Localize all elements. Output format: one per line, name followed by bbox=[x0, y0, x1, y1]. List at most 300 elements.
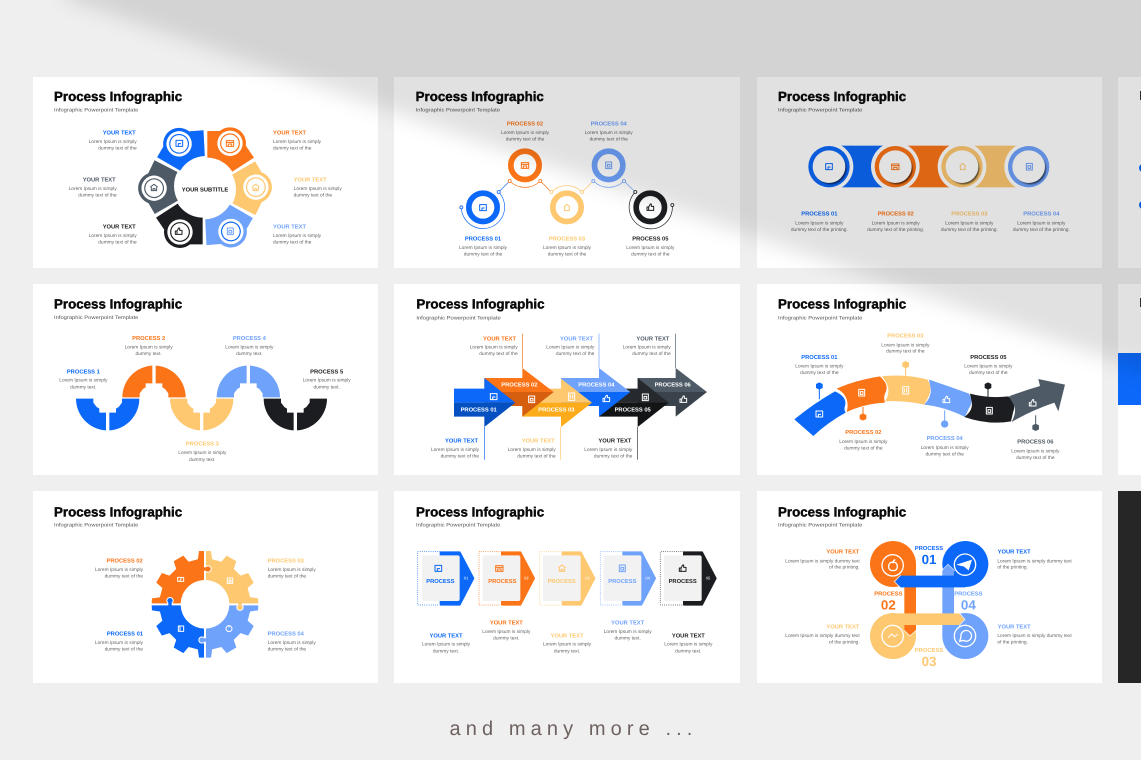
text block: top right bbox=[997, 548, 1072, 570]
text block: process 04: dummy text of the bbox=[589, 137, 628, 142]
text block: process 02: PROCESS 02 bbox=[878, 210, 914, 217]
icon: gear orange bbox=[178, 577, 184, 581]
text block: card 01: Lorem Ipsum is simply bbox=[422, 642, 470, 647]
text block: process 1: dummy text. bbox=[70, 384, 96, 390]
text block: top orange: dummy text of the bbox=[479, 351, 518, 356]
arrow labels: PROCESS 06 bbox=[655, 381, 691, 388]
label: process 03: 03 bbox=[922, 654, 936, 669]
text block: process 03 bbox=[881, 332, 930, 354]
label: process 03 bbox=[915, 647, 943, 669]
chevron card 03: 03 bbox=[585, 576, 590, 581]
text block: card 02: YOUR TEXT bbox=[490, 619, 523, 626]
text block: card 04: dummy text. bbox=[615, 635, 641, 641]
heading: Process Infographic bbox=[54, 297, 182, 311]
text block: process 06: PROCESS 06 bbox=[1017, 438, 1053, 445]
band: orange bbox=[895, 146, 962, 187]
text block: process 06: Lorem Ipsum is simply bbox=[1011, 449, 1060, 454]
text block: bottom black bbox=[584, 437, 633, 459]
text block: process 01: Lorem Ipsum is simply bbox=[95, 640, 143, 645]
puzzle tab: blue bbox=[166, 597, 174, 606]
text block: process 02: dummy text of the bbox=[844, 446, 883, 451]
text block: process 02: PROCESS 02 bbox=[845, 429, 881, 435]
chevron card 04: PROCESS bbox=[608, 578, 636, 584]
panel: linked circles band bbox=[757, 77, 1102, 268]
text block: process 4: PROCESS 4 bbox=[233, 335, 266, 341]
text block: process 05 bbox=[626, 235, 675, 257]
pin stems bbox=[819, 365, 1036, 427]
text block: bottom left: YOUR TEXT bbox=[826, 623, 859, 630]
arc: process 4 bbox=[217, 366, 280, 397]
text block: grey: dummy text of the bbox=[78, 193, 117, 198]
text block: orange: YOUR TEXT bbox=[273, 129, 306, 136]
icon: process 03 bbox=[960, 163, 966, 170]
text block: process 03 bbox=[941, 210, 998, 232]
chevron card 02: 02 bbox=[524, 576, 529, 581]
text block: card 05 bbox=[664, 632, 713, 654]
text block: process 04: Lorem Ipsum is simply bbox=[268, 640, 316, 645]
text block: card 04 bbox=[604, 619, 652, 641]
text block: process 01 bbox=[459, 235, 507, 257]
text block: bottom left: of the printing. bbox=[829, 640, 860, 645]
label: process 02 bbox=[874, 590, 902, 612]
icon: process 02 bbox=[521, 163, 529, 168]
chevron card 05 bbox=[660, 552, 716, 605]
text block: process 05: PROCESS 05 bbox=[970, 354, 1007, 360]
icon: arrow 05 bbox=[642, 394, 648, 401]
band: yellow bbox=[962, 146, 1029, 187]
text block: bottom blue: Lorem Ipsum is simply bbox=[431, 447, 479, 452]
text block: card 01 bbox=[422, 632, 470, 654]
label: process 04 bbox=[954, 590, 982, 612]
arrow labels bbox=[461, 381, 691, 413]
subheading: Infographic Powerpoint Template bbox=[54, 315, 138, 320]
text block: process 04 bbox=[1013, 210, 1070, 232]
text block: process 03: PROCESS 03 bbox=[268, 557, 304, 564]
icon: process 02 bbox=[892, 164, 899, 170]
panel: cropped slide middle right bbox=[1118, 284, 1141, 475]
text block: process 02: Lorem Ipsum is simply bbox=[501, 130, 549, 135]
loop circle: blue bbox=[942, 541, 988, 587]
text block: process 04: Lorem Ipsum is simply bbox=[1017, 220, 1066, 226]
text block: process 03: Lorem Ipsum is simply bbox=[881, 342, 930, 348]
label: process 03: PROCESS bbox=[915, 647, 943, 653]
gear quarter: light blue bbox=[206, 605, 258, 658]
text block: process 01 bbox=[95, 630, 143, 652]
text block: top left: of the printing. bbox=[829, 565, 860, 570]
icon: gear yellow bbox=[227, 578, 233, 583]
text block: process 03: dummy text of the bbox=[886, 349, 925, 354]
icon: blue segment bbox=[176, 140, 183, 146]
panel: chevron cards bbox=[394, 491, 740, 683]
cropped title edge bbox=[1140, 298, 1141, 307]
label: process 02: 02 bbox=[881, 598, 896, 612]
text block: process 03: PROCESS 03 bbox=[887, 332, 923, 339]
icon: yellow segment bbox=[252, 184, 259, 191]
text block: black: Lorem Ipsum is simply bbox=[89, 233, 137, 238]
text block: process 01: PROCESS 01 bbox=[465, 235, 501, 242]
connector nodes bbox=[460, 179, 674, 209]
text block: process 03: Lorem Ipsum is simply bbox=[543, 245, 591, 250]
text block: black: YOUR TEXT bbox=[103, 223, 136, 230]
arrow: process 05 bbox=[599, 378, 669, 427]
text block: process 02: PROCESS 02 bbox=[106, 557, 143, 564]
subheading: Infographic Powerpoint Template bbox=[54, 107, 138, 113]
text block: process 01: PROCESS 01 bbox=[801, 210, 838, 217]
panel: radial process wheel bbox=[33, 77, 378, 268]
text block: card 02: dummy text. bbox=[493, 635, 519, 641]
text block: light blue: YOUR TEXT bbox=[273, 223, 306, 230]
text block: process 01: Lorem Ipsum is simply bbox=[459, 245, 507, 250]
arrow labels: PROCESS 01 bbox=[461, 406, 497, 413]
text block: process 04: PROCESS 04 bbox=[1023, 210, 1060, 217]
text block: card 03: Lorem Ipsum is simply bbox=[543, 642, 591, 647]
text block: top light blue: Lorem Ipsum is simply bbox=[546, 345, 595, 350]
chevron card 01 bbox=[418, 552, 473, 605]
text block: process 2: Lorem Ipsum is simply bbox=[125, 344, 173, 350]
text block: blue: Lorem Ipsum is simply bbox=[89, 139, 137, 144]
text block: blue: YOUR TEXT bbox=[103, 129, 136, 136]
text block: process 2: dummy text. bbox=[136, 351, 162, 356]
text block: light blue bbox=[273, 223, 321, 245]
text block: bottom yellow bbox=[508, 437, 556, 459]
text block: bottom right: YOUR TEXT bbox=[998, 623, 1031, 630]
gear quarter: blue bbox=[152, 605, 204, 658]
text block: orange bbox=[273, 129, 321, 151]
chevron card 03: PROCESS bbox=[548, 578, 576, 584]
icon: piece 02 bbox=[859, 389, 865, 396]
text block: process 04: PROCESS 04 bbox=[591, 120, 627, 127]
text block: process 02: dummy text of the printing. bbox=[867, 227, 924, 232]
icon: piece 01 bbox=[816, 411, 823, 417]
icon: process 05 bbox=[647, 204, 654, 210]
loop band: yellow bbox=[893, 613, 964, 625]
text block: process 04 bbox=[268, 630, 316, 652]
icon: process 01 bbox=[826, 164, 832, 170]
wheel segment: light blue bbox=[194, 198, 256, 260]
text block: process 02: Lorem Ipsum is simply bbox=[839, 439, 888, 444]
text block: light blue: Lorem Ipsum is simply bbox=[273, 233, 321, 238]
heading: Process Infographic bbox=[778, 505, 906, 519]
text block: black bbox=[89, 223, 137, 245]
text block: process 01: dummy text of the bbox=[464, 252, 502, 257]
text block: bottom blue: YOUR TEXT bbox=[445, 437, 478, 444]
text block: process 01: dummy text of the bbox=[105, 647, 143, 652]
puzzle arrow: process 06 bbox=[1009, 379, 1065, 422]
text block: card 04: YOUR TEXT bbox=[611, 619, 644, 626]
text block: process 06 bbox=[1011, 438, 1060, 460]
icon: orange segment bbox=[226, 141, 234, 146]
text block: process 3: PROCESS 3 bbox=[186, 440, 219, 447]
icon: arrow 04 bbox=[603, 395, 610, 402]
text block: yellow: Lorem Ipsum is simply bbox=[294, 186, 342, 191]
text block: bottom yellow: Lorem Ipsum is simply bbox=[508, 447, 556, 452]
panel: cropped slide bottom right bbox=[1118, 491, 1141, 683]
text block: bottom black: YOUR TEXT bbox=[598, 437, 631, 444]
panel: gear puzzle bbox=[33, 491, 378, 683]
ring: process 01 bbox=[469, 193, 497, 221]
icon: light blue segment bbox=[227, 228, 233, 235]
icon: grey segment bbox=[150, 184, 158, 191]
text block: process 04: dummy text of the bbox=[925, 451, 964, 457]
text block: process 02: Lorem Ipsum is simply bbox=[95, 567, 143, 572]
text block: process 02: dummy text of the bbox=[105, 574, 143, 579]
gear quarter: yellow bbox=[206, 551, 258, 603]
gear quarter: orange bbox=[152, 551, 204, 603]
text block: bottom black: dummy text of the bbox=[594, 453, 632, 459]
text block: bottom right: of the printing. bbox=[997, 640, 1028, 645]
circle: process 02 bbox=[871, 142, 920, 191]
text block: process 04: PROCESS 04 bbox=[268, 630, 304, 637]
text block: bottom yellow: dummy text of the bbox=[517, 453, 556, 459]
arrow: process 03 bbox=[522, 379, 592, 427]
text block: process 05: dummy text of the bbox=[631, 252, 670, 257]
chevron card 04: 04 bbox=[645, 576, 650, 581]
puzzle piece: process 05 bbox=[964, 394, 1014, 423]
text block: process 01: Lorem Ipsum is simply bbox=[795, 364, 844, 369]
text block: process 02: PROCESS 02 bbox=[507, 120, 543, 127]
text block: process 01 bbox=[795, 354, 844, 375]
arrow labels: PROCESS 03 bbox=[538, 406, 574, 413]
text block: blue bbox=[89, 129, 137, 151]
puzzle piece: process 03 bbox=[882, 376, 930, 405]
text block: top grey: YOUR TEXT bbox=[636, 335, 669, 342]
text block: black: dummy text of the bbox=[98, 240, 137, 245]
text block: bottom blue bbox=[431, 437, 479, 459]
text block: card 05: dummy text. bbox=[675, 648, 701, 654]
icon: process 04 bbox=[606, 162, 612, 169]
text block: process 03: dummy text of the printing. bbox=[941, 227, 998, 232]
text block: process 05: dummy text of the bbox=[969, 370, 1008, 375]
text block: process 02: Lorem Ipsum is simply bbox=[872, 220, 920, 226]
text block: process 03 bbox=[543, 235, 591, 257]
arc: process 5 bbox=[264, 399, 327, 430]
ring: process 02 bbox=[511, 151, 539, 179]
pin heads bbox=[816, 361, 1039, 431]
puzzle piece: process 04 bbox=[924, 380, 971, 417]
circle: process 01 bbox=[805, 142, 853, 191]
loop band: blue bbox=[895, 576, 965, 587]
text block: process 06: dummy text of the bbox=[1016, 455, 1055, 460]
text block: process 04: Lorem Ipsum is simply bbox=[921, 445, 969, 450]
text block: process 01: dummy text of the bbox=[800, 370, 839, 375]
cropped blue dots bbox=[1139, 164, 1141, 209]
text block: process 05: Lorem Ipsum is simply bbox=[626, 245, 675, 250]
text block: top light blue: dummy text of the bbox=[556, 351, 594, 356]
circle: process 04 bbox=[1004, 142, 1053, 191]
icon: process 01 bbox=[480, 205, 486, 211]
heading: Process Infographic bbox=[54, 505, 182, 519]
connector lines bbox=[461, 181, 672, 229]
icon: piece 04 bbox=[943, 396, 950, 403]
subheading: Infographic Powerpoint Template bbox=[416, 522, 500, 528]
icon ring: blue send bbox=[954, 554, 976, 575]
text block: top right: YOUR TEXT bbox=[998, 548, 1031, 555]
icon: gear blue bbox=[178, 626, 184, 631]
heading: Process Infographic bbox=[778, 89, 906, 104]
puzzle tab: orange bbox=[203, 565, 212, 573]
text block: bottom left bbox=[785, 623, 860, 645]
chevron card 02: PROCESS bbox=[488, 578, 516, 584]
icon ring: orange apple bbox=[882, 555, 903, 576]
text block: top orange: Lorem Ipsum is simply bbox=[470, 345, 518, 350]
chevron card 01: PROCESS bbox=[426, 578, 454, 584]
icon ring: light blue phone bbox=[954, 625, 976, 647]
subheading: Infographic Powerpoint Template bbox=[778, 315, 862, 321]
label: process 01: 01 bbox=[922, 552, 936, 567]
text block: card 02: Lorem Ipsum is simply bbox=[482, 629, 531, 634]
text block: process 04: PROCESS 04 bbox=[927, 435, 963, 441]
text block: top grey: dummy text of the bbox=[632, 351, 671, 356]
text block: grey: Lorem Ipsum is simply bbox=[69, 186, 117, 191]
loop: orange bbox=[870, 541, 916, 635]
icon: arrow 01 bbox=[490, 394, 497, 400]
text block: top orange: YOUR TEXT bbox=[483, 335, 516, 342]
loop circle: yellow bbox=[870, 613, 916, 659]
arc: process 3 bbox=[170, 399, 233, 430]
wheel segment: blue bbox=[154, 115, 216, 178]
text block: orange: dummy text of the bbox=[273, 146, 311, 151]
ring: process 03 bbox=[553, 193, 581, 221]
text block: top left: YOUR TEXT bbox=[826, 548, 859, 555]
text block: card 01: YOUR TEXT bbox=[430, 632, 463, 639]
wheel segment: grey bbox=[128, 153, 190, 216]
text block: process 04 bbox=[585, 120, 633, 142]
text block: process 3: dummy text. bbox=[189, 457, 215, 462]
text block: process 01: dummy text of the printing. bbox=[791, 227, 848, 232]
label: process 02: PROCESS bbox=[874, 590, 902, 597]
text block: top grey bbox=[623, 335, 671, 356]
text block: top left bbox=[785, 548, 860, 570]
text block: yellow: YOUR TEXT bbox=[294, 176, 327, 183]
text block: card 03: YOUR TEXT bbox=[551, 632, 584, 639]
text block: process 04: dummy text of the bbox=[268, 647, 306, 652]
label: process 01 bbox=[915, 545, 943, 567]
puzzle piece: process 01 bbox=[794, 391, 846, 436]
text block: process 04: dummy text of the printing. bbox=[1013, 227, 1070, 232]
text block: process 02 bbox=[95, 557, 143, 579]
panel: wave arcs bbox=[33, 284, 378, 475]
arrow: process 02 bbox=[484, 368, 554, 417]
arrow: process 01 bbox=[454, 378, 515, 427]
text block: process 4 bbox=[225, 335, 274, 356]
text block: top light blue: YOUR TEXT bbox=[560, 335, 593, 342]
icon: arrow 03 bbox=[569, 393, 575, 400]
text block: top right: Lorem Ipsum is simply dummy text bbox=[997, 558, 1072, 564]
footer caption: and many more ... bbox=[450, 718, 697, 740]
heading: Process Infographic bbox=[416, 297, 545, 312]
cropped title edge bbox=[1140, 91, 1141, 100]
circle: process 03 bbox=[938, 142, 986, 191]
text block: top right: of the printing. bbox=[997, 565, 1028, 570]
label: process 04: PROCESS bbox=[954, 590, 982, 597]
leader lines bbox=[484, 334, 676, 460]
text block: bottom left: Lorem Ipsum is simply dummy text bbox=[785, 633, 860, 638]
puzzle piece: process 02 bbox=[837, 376, 887, 412]
arrow labels: PROCESS 05 bbox=[615, 406, 651, 413]
text block: process 02 bbox=[501, 120, 549, 142]
text block: bottom yellow: YOUR TEXT bbox=[522, 437, 555, 444]
text block: card 04: Lorem Ipsum is simply bbox=[604, 629, 652, 634]
text block: process 1 bbox=[59, 368, 108, 390]
text block: light blue: dummy text of the bbox=[273, 240, 311, 245]
text block: bottom right bbox=[997, 623, 1072, 645]
text block: process 01 bbox=[791, 210, 848, 232]
text block: yellow bbox=[294, 176, 342, 198]
arrow labels: PROCESS 04 bbox=[578, 381, 615, 388]
text block: process 05 bbox=[964, 354, 1013, 375]
text block: process 5 bbox=[303, 368, 351, 390]
text block: card 03 bbox=[543, 632, 591, 654]
wheel segment: yellow bbox=[220, 160, 282, 222]
text block: process 02 bbox=[839, 429, 888, 451]
text block: process 03: dummy text of the bbox=[268, 574, 306, 579]
text block: process 05: PROCESS 05 bbox=[632, 235, 669, 242]
panel: zigzag circles bbox=[394, 77, 740, 268]
text block: card 05: Lorem Ipsum is simply bbox=[664, 642, 713, 647]
cropped blue block bbox=[1118, 353, 1141, 405]
text block: bottom blue: dummy text of the bbox=[441, 453, 479, 459]
icon: arrow 06 bbox=[680, 396, 687, 402]
wheel segment: orange bbox=[207, 127, 254, 172]
icon: black segment bbox=[175, 228, 182, 234]
text block: process 02: dummy text of the bbox=[506, 137, 544, 142]
heading: Process Infographic bbox=[54, 89, 182, 104]
chevron card 03 bbox=[540, 552, 594, 605]
text block: process 3: Lorem Ipsum is simply bbox=[178, 450, 227, 455]
icon: process 03 bbox=[564, 204, 570, 211]
text block: process 03 bbox=[268, 557, 316, 579]
icon ring: yellow messenger bbox=[882, 625, 903, 647]
arc: process 2 bbox=[122, 366, 186, 397]
chevron card 05: PROCESS bbox=[669, 578, 697, 584]
panel: puzzle arrow bbox=[757, 284, 1102, 475]
text block: process 03: Lorem Ipsum is simply bbox=[945, 220, 994, 226]
text block: process 1: Lorem Ipsum is simply bbox=[59, 378, 108, 383]
text block: blue: dummy text of the bbox=[98, 146, 137, 151]
text block: process 5: Lorem Ipsum is simply bbox=[303, 378, 351, 383]
text block: process 03: PROCESS 03 bbox=[951, 210, 987, 217]
subheading: Infographic Powerpoint Template bbox=[54, 522, 138, 528]
icon: arrow piece 06 bbox=[1029, 400, 1036, 406]
subheading: Infographic Powerpoint Template bbox=[778, 107, 862, 113]
text block: process 03: dummy text of the bbox=[548, 252, 586, 257]
arc: process 1 bbox=[76, 399, 139, 430]
text block: bottom right: Lorem Ipsum is simply dummy text bbox=[997, 633, 1072, 638]
wheel centre label: YOUR SUBTITLE bbox=[182, 186, 228, 193]
chevron card 02 bbox=[479, 552, 534, 605]
heading: Process Infographic bbox=[778, 297, 906, 312]
icon: gear light blue bbox=[226, 626, 232, 632]
wheel segment: black bbox=[156, 204, 203, 248]
text block: top light blue bbox=[546, 335, 595, 356]
subheading: Infographic Powerpoint Template bbox=[416, 315, 501, 321]
text block: process 04 bbox=[921, 435, 969, 457]
panel: interlocking arrows bbox=[394, 284, 740, 475]
text block: top left: Lorem Ipsum is simply dummy text bbox=[785, 558, 860, 564]
text block: top orange bbox=[470, 335, 518, 356]
icon: process 04 bbox=[1026, 163, 1032, 170]
text block: process 03: Lorem Ipsum is simply bbox=[268, 567, 316, 572]
ring: process 04 bbox=[594, 151, 623, 179]
label: process 01: PROCESS bbox=[915, 545, 943, 551]
text block: process 2: PROCESS 2 bbox=[132, 335, 165, 341]
subheading: Infographic Powerpoint Template bbox=[778, 522, 862, 528]
window light shadow overlay bbox=[40, 0, 1141, 404]
text block: process 5: dummy text. bbox=[314, 384, 340, 390]
text block: grey bbox=[69, 176, 117, 198]
text block: process 01: Lorem Ipsum is simply bbox=[795, 220, 844, 226]
arrow labels: PROCESS 02 bbox=[501, 381, 537, 388]
